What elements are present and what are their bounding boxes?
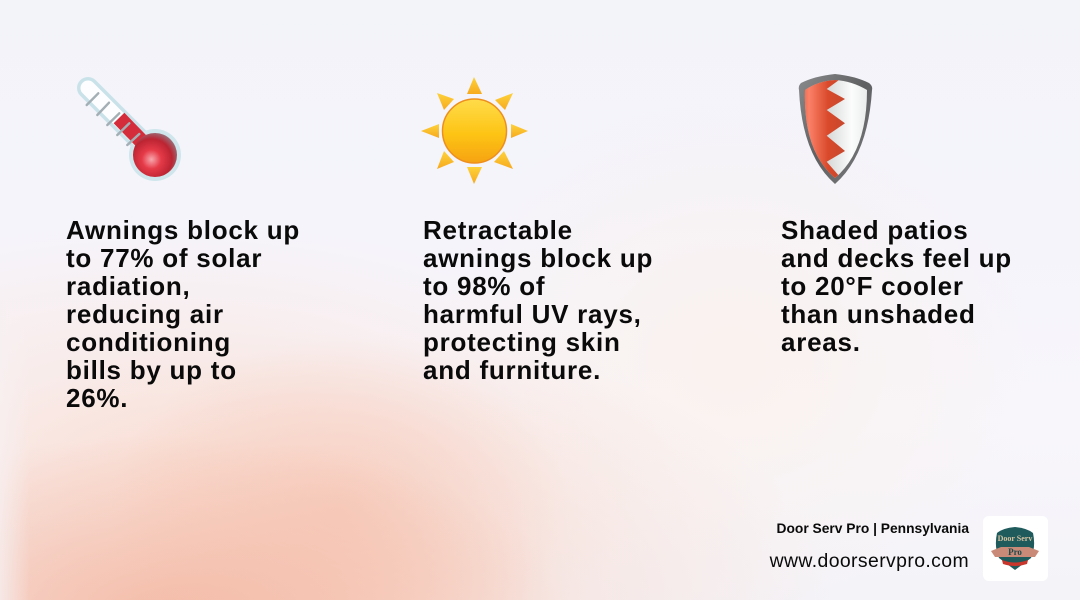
text block: cooler patios: and decks feel up <box>781 243 1012 273</box>
text block: cooler patios: than unshaded <box>781 299 976 329</box>
icon: door serv pro logo: Door Serv <box>998 534 1032 543</box>
text block: solar radiation: reducing air <box>66 299 224 329</box>
text block: solar radiation: bills by up to <box>66 355 237 385</box>
text block: solar radiation <box>66 215 300 413</box>
text block: solar radiation: 26%. <box>66 383 128 413</box>
icon: shield <box>798 74 872 184</box>
text block: UV rays: Retractable <box>423 215 573 245</box>
text block: solar radiation: radiation, <box>66 271 191 301</box>
text block: solar radiation: Awnings block up <box>66 215 300 245</box>
icon: sun <box>421 77 528 184</box>
icon: thermometer <box>77 77 181 181</box>
brand name: Door Serv Pro | Pennsylvania <box>776 521 969 536</box>
text block: cooler patios: areas. <box>781 327 861 357</box>
text block: solar radiation: to 77% of solar <box>66 243 262 273</box>
text block: UV rays: and furniture. <box>423 355 601 385</box>
text block: UV rays <box>423 215 653 385</box>
icon: door serv pro logo <box>991 527 1039 570</box>
text block: cooler patios: to 20°F cooler <box>781 271 964 301</box>
text block: cooler patios: Shaded patios <box>781 215 968 245</box>
website: www.doorservpro.com <box>770 550 969 572</box>
text block: UV rays: protecting skin <box>423 327 621 357</box>
logo card <box>983 516 1048 581</box>
text block: cooler patios <box>781 215 1012 357</box>
text block: UV rays: to 98% of <box>423 271 545 301</box>
text block: solar radiation: conditioning <box>66 327 231 357</box>
text block: UV rays: awnings block up <box>423 243 653 273</box>
text block: UV rays: harmful UV rays, <box>423 299 642 329</box>
icon: door serv pro logo: Pro <box>1008 547 1022 557</box>
